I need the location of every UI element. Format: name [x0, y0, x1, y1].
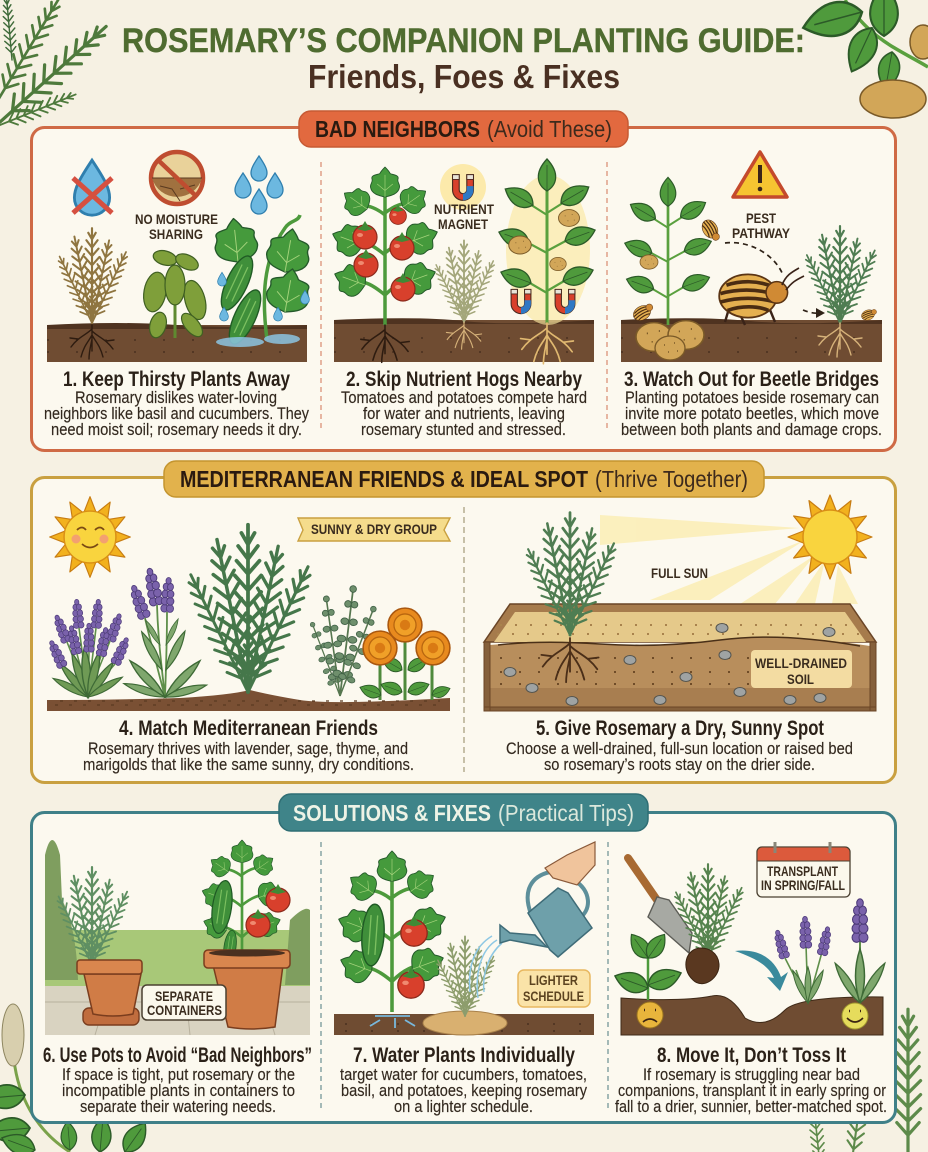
card 5 illustration: raised bed	[484, 495, 876, 711]
card 2 body text: for water and nutrients, leaving	[363, 405, 565, 423]
card 5 illustration: raised bed: FULL SUN	[651, 565, 708, 581]
card 7 heading: 7. Water Plants Individually	[353, 1044, 575, 1067]
section pill: bad neighbors: (Avoid These)	[487, 116, 612, 142]
title: Friends, Foes & Fixes	[308, 58, 620, 95]
card 6 illustration: pots: CONTAINERS	[147, 1002, 222, 1018]
card 1 body text: Rosemary dislikes water-loving	[75, 389, 277, 407]
card 4 illustration: friends garden: SUNNY & DRY GROUP	[311, 521, 437, 537]
section pill: Mediterranean friends: (Thrive Together)	[595, 466, 748, 492]
card 8 illustration: transplant	[612, 842, 888, 1035]
card 2 body text	[341, 389, 587, 439]
corner decoration: rosemary bottom right	[806, 1009, 921, 1152]
section pill: Mediterranean friends: MEDITERRANEAN FRIENDS & IDEAL SPOT	[180, 466, 588, 492]
section pill: solutions and fixes	[279, 794, 648, 831]
section pill: Mediterranean friends	[164, 461, 764, 497]
card 7 body text: basil, and potatoes, keeping rosemary	[341, 1082, 588, 1100]
card 3 body text: invite more potato beetles, which move	[625, 405, 879, 423]
card 1 body text: need moist soil; rosemary needs it dry.	[51, 421, 302, 439]
card 8 body text: If rosemary is struggling near bad	[643, 1066, 860, 1084]
card 6 body text: separate their watering needs.	[80, 1098, 276, 1116]
card 7 body text	[340, 1066, 588, 1116]
corner decoration: rosemary top left	[0, 0, 115, 132]
card 2 heading: 2. Skip Nutrient Hogs Nearby	[346, 368, 582, 391]
section pill: solutions and fixes: (Practical Tips)	[498, 800, 634, 826]
card 3 illustration: beetle bridges	[621, 152, 882, 362]
panel: Mediterranean friends	[32, 461, 896, 782]
card 7 illustration: watering: LIGHTER	[529, 972, 578, 988]
card 1 heading: 1. Keep Thirsty Plants Away	[63, 368, 290, 391]
card 2 illustration: nutrient hogs: NUTRIENT	[434, 201, 494, 217]
card 8 heading: 8. Move It, Don’t Toss It	[657, 1044, 846, 1067]
card 6 illustration: pots	[45, 840, 310, 1035]
card 3 body text: between both plants and damage crops.	[621, 421, 882, 439]
card 3 body text: Planting potatoes beside rosemary can	[625, 389, 879, 407]
card 6 heading: 6. Use Pots to Avoid “Bad Neighbors”	[43, 1044, 312, 1067]
section pill: bad neighbors: BAD NEIGHBORS	[315, 116, 480, 142]
card 6 body text: If space is tight, put rosemary or the	[62, 1066, 295, 1084]
card 5 illustration: raised bed: WELL-DRAINED	[755, 655, 847, 671]
card 2 illustration: nutrient hogs	[327, 159, 598, 364]
section pill: bad neighbors	[299, 111, 628, 147]
card 7 illustration: watering: SCHEDULE	[523, 988, 584, 1004]
card 3 body text	[621, 389, 882, 439]
card 5 body text: Choose a well-drained, full-sun location or raised bed	[506, 740, 853, 758]
card 7 body text: target water for cucumbers, tomatoes,	[340, 1066, 587, 1084]
card 5 body text	[506, 740, 853, 774]
card 3 illustration: beetle bridges: PEST	[746, 210, 776, 226]
card 2 illustration: nutrient hogs: MAGNET	[438, 216, 488, 232]
card 4 illustration: friends garden	[46, 497, 452, 711]
title	[122, 22, 805, 95]
panel: solutions and fixes	[32, 794, 896, 1122]
card 8 body text: fall to a drier, sunnier, better-matched spot.	[615, 1098, 887, 1116]
corner decoration: potato plant top right	[799, 0, 928, 118]
card 4 body text: Rosemary thrives with lavender, sage, thyme, and	[88, 740, 408, 758]
card 2 body text: Tomatoes and potatoes compete hard	[341, 389, 587, 407]
card 4 body text	[83, 740, 414, 774]
card 8 body text	[615, 1066, 887, 1116]
card 1 body text: neighbors like basil and cucumbers. They	[44, 405, 310, 423]
section pill: solutions and fixes: SOLUTIONS & FIXES	[293, 800, 491, 826]
card 4 body text: marigolds that like the same sunny, dry conditions.	[83, 756, 414, 774]
corner decoration: leafy sprig bottom left	[0, 1004, 153, 1152]
card 1 illustration: thirsty plants: NO MOISTURE	[135, 211, 218, 227]
card 8 illustration: transplant: TRANSPLANT	[767, 863, 838, 879]
card 7 body text: on a lighter schedule.	[394, 1098, 533, 1116]
card 5 body text: so rosemary’s roots stay on the drier side.	[544, 756, 815, 774]
card 6 body text: incompatible plants in containers to	[62, 1082, 295, 1100]
card 8 illustration: transplant: IN SPRING/FALL	[761, 877, 845, 893]
card 6 illustration: pots: SEPARATE	[155, 988, 213, 1004]
card 1 illustration: thirsty plants: SHARING	[149, 226, 203, 242]
card 4 heading: 4. Match Mediterranean Friends	[119, 717, 378, 740]
card 1 illustration: thirsty plants	[47, 152, 314, 362]
card 6 body text	[62, 1066, 295, 1116]
card 7 illustration: watering	[333, 842, 595, 1035]
title: ROSEMARY’S COMPANION PLANTING GUIDE:	[122, 22, 805, 60]
card 8 body text: companions, transplant it in early spring or	[618, 1082, 886, 1100]
card 5 heading: 5. Give Rosemary a Dry, Sunny Spot	[536, 717, 824, 740]
card 3 illustration: beetle bridges: PATHWAY	[732, 225, 791, 241]
card 2 body text: rosemary stunted and stressed.	[361, 421, 566, 439]
panel: bad neighbors	[32, 111, 896, 450]
card 5 illustration: raised bed: SOIL	[787, 671, 814, 687]
card 1 body text	[44, 389, 310, 439]
